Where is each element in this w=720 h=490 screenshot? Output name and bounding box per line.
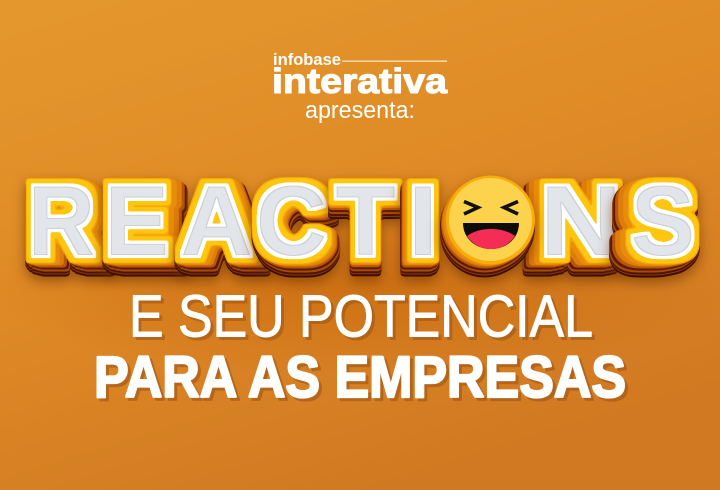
letter I: I — [408, 165, 438, 276]
logo: infobase interativa: infobase — [273, 51, 341, 69]
letter C: C — [256, 165, 327, 276]
letter E: E — [104, 165, 169, 276]
presenter line: apresenta: — [305, 97, 415, 124]
letter R: R — [28, 165, 95, 276]
logo: infobase interativa: interativa — [272, 62, 448, 101]
letter T: T — [336, 165, 396, 276]
title: REACTIONS — [28, 165, 695, 276]
icon: laughing emoji as letter O — [446, 176, 535, 264]
subtitle: E SEU POTENCIAL: E SEU POTENCIAL — [129, 284, 593, 350]
letter N: N — [540, 165, 622, 276]
letter S: S — [631, 165, 695, 276]
subtitle: PARA AS EMPRESAS: PARA AS EMPRESAS — [94, 345, 626, 410]
letter A: A — [180, 165, 253, 276]
logo: infobase interativa — [272, 51, 448, 101]
